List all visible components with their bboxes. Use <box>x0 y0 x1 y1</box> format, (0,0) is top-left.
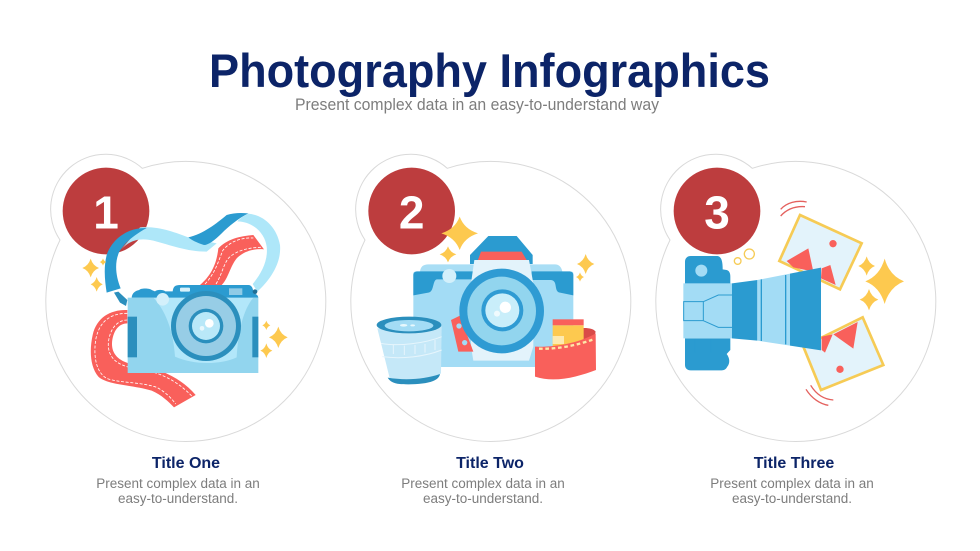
panel: one <box>46 154 326 441</box>
icon: motion arcs <box>781 201 833 405</box>
caption: title two <box>401 455 565 506</box>
caption: title two: Title Two <box>456 455 524 472</box>
caption: title three: easy-to-understand. <box>732 491 852 506</box>
icon: top photo <box>779 215 862 289</box>
icon: bottom photo <box>803 317 883 390</box>
icon: sparkles <box>858 256 904 310</box>
icon: camera <box>128 285 258 373</box>
panel: two <box>351 154 631 441</box>
icon: sparkles <box>440 217 594 282</box>
number badge 1 <box>63 168 149 254</box>
number badge 3: 3 <box>704 187 730 239</box>
number badge 1: 1 <box>93 187 119 239</box>
caption: title three <box>710 455 874 506</box>
title: Photography Infographics <box>209 45 770 98</box>
caption: title one: easy-to-understand. <box>118 491 238 506</box>
caption: title three: Title Three <box>754 455 834 472</box>
caption: title two: easy-to-understand. <box>423 491 543 506</box>
icon: small rings <box>734 249 754 264</box>
icon: camera side view <box>683 256 821 370</box>
icon: lens <box>377 317 442 384</box>
panel outline <box>46 154 326 441</box>
number badge 2 <box>368 168 455 254</box>
subtitle: Present complex data in an easy-to-understand way <box>295 96 660 114</box>
panel outline <box>351 154 631 441</box>
caption: title one: Present complex data in an <box>96 476 260 491</box>
panel outline <box>656 154 936 441</box>
icon: sparkles <box>82 258 288 358</box>
number badge 2: 2 <box>399 187 424 239</box>
icon: camera strap <box>105 213 280 306</box>
icon: camera <box>413 236 573 367</box>
caption: title one <box>96 455 260 506</box>
icon: film roll <box>535 319 596 379</box>
number badge 3 <box>674 168 760 254</box>
caption: title three: Present complex data in an <box>710 476 874 491</box>
caption: title two: Present complex data in an <box>401 476 565 491</box>
icon: film strip <box>91 235 264 407</box>
caption: title one: Title One <box>152 455 220 472</box>
panel: three <box>656 154 936 441</box>
